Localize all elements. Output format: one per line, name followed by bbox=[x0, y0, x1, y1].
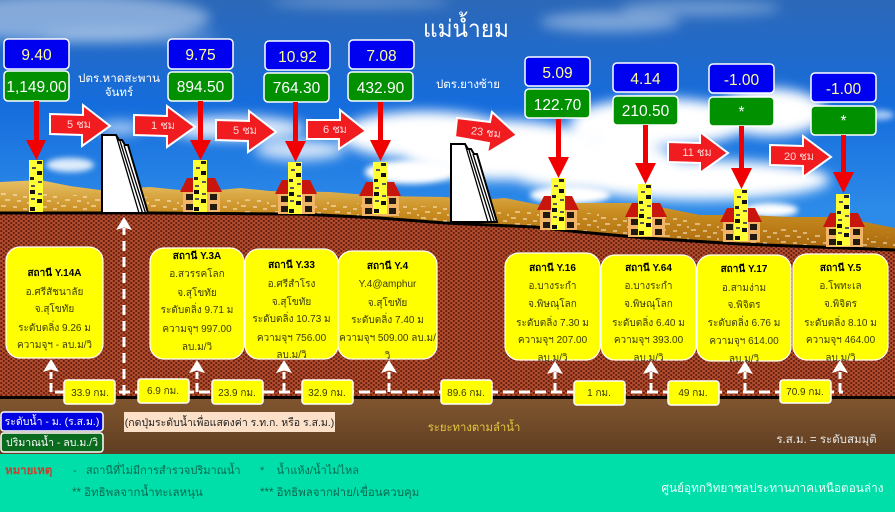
station card Y.3A: จ.สุโขทัย bbox=[177, 286, 217, 299]
station card Y.14A: จ.สุโขทัย bbox=[35, 302, 74, 315]
station card Y.17 bbox=[697, 255, 791, 365]
remarks heading: หมายเหตุ bbox=[5, 465, 52, 478]
station card Y.16: จ.พิษณุโลก bbox=[528, 297, 577, 310]
water level bbox=[709, 64, 774, 93]
house bbox=[720, 208, 762, 242]
remarks bbox=[5, 462, 419, 499]
gauge bbox=[29, 160, 43, 212]
station card Y.17: ความจุฯ 614.00 bbox=[709, 336, 779, 347]
station card Y.5 bbox=[793, 254, 888, 364]
station card Y.33: ความจุฯ 756.00 bbox=[257, 333, 327, 344]
arrow: 23 hours bbox=[455, 112, 517, 153]
station card Y.64: จ.พิษณุโลก bbox=[624, 297, 673, 310]
footer band bbox=[0, 454, 895, 512]
distance 33.9 km: 33.9 กม. bbox=[71, 388, 109, 399]
river bed base line bbox=[0, 396, 895, 399]
arrow: 23 hours: 23 ชม bbox=[470, 125, 502, 141]
station card Y.64: ความจุฯ 393.00 bbox=[614, 335, 684, 346]
pointer arrow bbox=[731, 126, 752, 189]
distance 6.9 km bbox=[138, 379, 189, 403]
station card Y.16: อ.บางระกำ bbox=[528, 281, 577, 292]
water level bbox=[265, 41, 330, 70]
arrow: 1 hour: 1 ชม bbox=[151, 120, 175, 132]
distance 32.9 km: 32.9 กม. bbox=[308, 388, 346, 399]
legend: water level button bbox=[1, 412, 103, 431]
pointer arrow bbox=[26, 101, 46, 160]
arrow: 1 hour bbox=[134, 106, 195, 147]
distance 33.9 km bbox=[64, 380, 115, 404]
arrow: 11 hours: 11 ชม bbox=[682, 147, 712, 159]
arrow: 5 hours: 5 ชม bbox=[67, 119, 91, 131]
station card Y.16: สถานี Y.16 bbox=[529, 262, 576, 274]
water level bbox=[4, 39, 69, 69]
water level bbox=[811, 73, 876, 102]
water level: 10.92 bbox=[278, 49, 317, 66]
station card Y.3A: ความจุฯ 997.00 bbox=[162, 324, 232, 335]
station card Y.3A: ลบ.ม/วิ bbox=[182, 342, 212, 353]
legend: discharge button: ปริมาณน้ำ - ลบ.ม./วิ bbox=[6, 435, 98, 449]
station card Y.4: Y.4@amphur bbox=[359, 279, 417, 290]
house bbox=[537, 196, 579, 230]
discharge: 210.50 bbox=[622, 103, 670, 120]
remark: weir: *** อิทธิพลจากฝาย/เขื่อนควบคุม bbox=[260, 484, 419, 499]
station card Y.4: ระดับตลิ่ง 7.40 ม bbox=[351, 312, 424, 326]
arrow: 5 hours: 5 ชม bbox=[233, 125, 257, 137]
station Y.3A reading bbox=[168, 39, 233, 212]
lower soil band bbox=[0, 398, 895, 454]
credit: ศูนย์อุทกวิทยาชลประทานภาคเหนือตอนล่าง bbox=[662, 481, 883, 496]
distance 1 km: 1 กม. bbox=[587, 388, 611, 399]
flow arrowheads bbox=[43, 217, 848, 374]
station card Y.64: ระดับตลิ่ง 6.40 ม bbox=[612, 315, 685, 329]
distance 1 km bbox=[574, 381, 625, 405]
dam label: hat saphan chan: จันทร์ bbox=[105, 85, 133, 99]
arrow: 6 hours: 6 ชม bbox=[323, 124, 347, 136]
dam: hat saphan chan bbox=[102, 135, 148, 213]
station card Y.64: สถานี Y.64 bbox=[625, 262, 672, 274]
distance labels bbox=[64, 379, 831, 405]
arrow: 5 hours bbox=[50, 105, 110, 146]
station card Y.3A: อ.สวรรคโลก bbox=[169, 267, 225, 280]
station card Y.3A: ระดับตลิ่ง 9.71 ม bbox=[161, 302, 233, 316]
arrow: 5 hours bbox=[216, 111, 276, 152]
water level: -1.00 bbox=[724, 72, 760, 89]
station card Y.4 bbox=[338, 251, 437, 362]
water level bbox=[613, 63, 678, 92]
pointer arrow bbox=[833, 135, 854, 193]
pointer arrow bbox=[548, 119, 569, 178]
sky background bbox=[0, 0, 895, 260]
station card Y.33: อ.ศรีสำโรง bbox=[268, 277, 316, 290]
station Y.17 reading bbox=[709, 64, 774, 242]
water level: 5.09 bbox=[542, 65, 573, 82]
station card Y.14A: สถานี Y.14A bbox=[27, 267, 82, 279]
station card Y.4: สถานี Y.4 bbox=[367, 260, 409, 272]
legend: discharge button bbox=[1, 433, 103, 452]
station card Y.16: ลบ.ม/วิ bbox=[537, 353, 568, 364]
station Y.4 reading bbox=[348, 40, 414, 216]
pointer arrow bbox=[635, 125, 656, 184]
discharge bbox=[168, 72, 233, 101]
distance 89.6 km bbox=[441, 380, 492, 404]
water level bbox=[525, 57, 590, 86]
gauge bbox=[734, 189, 748, 241]
station card Y.5: จ.พิจิตร bbox=[824, 299, 858, 310]
water level: 9.40 bbox=[21, 47, 52, 64]
remark: no survey: - สถานีที่ไม่มีการสำรวจปริมาณน้ำ bbox=[73, 462, 241, 477]
discharge: 1,149.00 bbox=[6, 79, 67, 96]
station card Y.16: ระดับตลิ่ง 7.30 ม bbox=[516, 315, 589, 329]
dam label: hat saphan chan bbox=[78, 73, 160, 99]
discharge: 122.70 bbox=[534, 97, 582, 114]
station card Y.4: ความจุฯ 509.00 ลบ.ม/ bbox=[339, 333, 436, 344]
station card Y.64 bbox=[601, 255, 696, 364]
station Y.5 reading bbox=[811, 73, 876, 247]
station card Y.16 bbox=[505, 253, 600, 364]
discharge bbox=[613, 96, 678, 125]
station Y.33 reading bbox=[264, 41, 330, 214]
station card Y.33: จ.สุโขทัย bbox=[272, 295, 311, 308]
house bbox=[275, 180, 317, 214]
pointer arrow bbox=[285, 102, 306, 162]
gauge bbox=[836, 194, 850, 246]
dam label: yang sai: ปตร.ยางซ้าย bbox=[436, 78, 500, 91]
station card Y.5: ระดับตลิ่ง 8.10 ม bbox=[804, 315, 877, 329]
water level: 7.08 bbox=[366, 48, 397, 65]
axis label: distance along river: ระยะทางตามลำน้ำ bbox=[428, 419, 520, 434]
station card Y.3A: สถานี Y.3A bbox=[173, 250, 221, 262]
water level: 4.14 bbox=[630, 71, 661, 88]
arrow: 20 hours bbox=[770, 136, 831, 177]
discharge: 432.90 bbox=[357, 80, 405, 97]
station Y.14A reading bbox=[4, 39, 69, 212]
station card Y.17: ระดับตลิ่ง 6.76 ม bbox=[708, 315, 780, 329]
station card Y.33: ระดับตลิ่ง 10.73 ม bbox=[252, 311, 331, 325]
water level bbox=[349, 40, 414, 69]
house bbox=[359, 182, 401, 216]
station card Y.4: จ.สุโขทัย bbox=[368, 296, 407, 309]
discharge: * bbox=[738, 104, 745, 121]
pointer arrow bbox=[190, 101, 211, 160]
river bed bbox=[0, 213, 895, 398]
river distance dashed line bbox=[51, 228, 843, 395]
distance 49 km bbox=[668, 381, 719, 405]
discharge bbox=[709, 97, 774, 126]
distance 32.9 km bbox=[302, 380, 353, 404]
distance 70.9 km bbox=[780, 380, 831, 403]
station card Y.17: อ.สามง่าม bbox=[722, 283, 766, 294]
gauge bbox=[288, 162, 302, 214]
station card Y.5: สถานี Y.5 bbox=[820, 262, 862, 274]
dam label: hat saphan chan: ปตร.หาดสะพาน bbox=[78, 73, 160, 85]
station card Y.17: สถานี Y.17 bbox=[721, 263, 768, 275]
water level: -1.00 bbox=[826, 81, 862, 98]
station card Y.33 bbox=[245, 249, 338, 361]
house bbox=[625, 203, 667, 237]
remark: dry: * น้ำแห้ง/น้ำไม่ไหล bbox=[260, 462, 359, 477]
station card Y.5: อ.โพทะเล bbox=[819, 279, 862, 292]
remark: tidal: ** อิทธิพลจากน้ำทะเลหนุน bbox=[72, 484, 203, 499]
discharge bbox=[525, 89, 590, 118]
discharge: 764.30 bbox=[273, 80, 321, 97]
station card Y.33: สถานี Y.33 bbox=[268, 259, 315, 271]
discharge bbox=[348, 72, 413, 101]
arrow: 6 hours bbox=[307, 110, 366, 149]
station card Y.17: จ.พิจิตร bbox=[728, 300, 761, 311]
discharge bbox=[811, 106, 876, 135]
water level bbox=[168, 39, 233, 69]
station card Y.64: ลบ.ม/วิ bbox=[633, 353, 664, 364]
discharge: * bbox=[840, 113, 847, 130]
gauge bbox=[373, 162, 387, 214]
distance 49 km: 49 กม. bbox=[678, 388, 708, 399]
dam: yang sai bbox=[451, 144, 497, 222]
house bbox=[180, 178, 222, 212]
station card Y.5: ลบ.ม/วิ bbox=[825, 353, 856, 364]
arrow: 11 hours bbox=[668, 132, 728, 173]
station card Y.4: วิ bbox=[384, 351, 390, 362]
instruction note bbox=[124, 412, 335, 432]
water level: 9.75 bbox=[185, 47, 216, 64]
station card Y.14A: อ.ศรีสัชนาลัย bbox=[26, 286, 83, 298]
station card Y.14A bbox=[6, 247, 103, 358]
title: แม่น้ำยม bbox=[423, 11, 509, 43]
station Y.64 reading bbox=[613, 63, 678, 237]
sand hills bbox=[0, 180, 895, 252]
station card Y.3A bbox=[150, 248, 244, 359]
distance 23.9 km bbox=[212, 380, 263, 404]
pointer arrow bbox=[370, 102, 391, 161]
station Y.16 reading bbox=[525, 57, 590, 230]
legend: water level button: ระดับน้ำ - ม. (ร.ส.ม.) bbox=[5, 414, 99, 428]
arrow: 20 hours: 20 ชม bbox=[784, 151, 814, 163]
station card Y.14A: ความจุฯ - ลบ.ม/วิ bbox=[17, 340, 92, 351]
distance 6.9 km: 6.9 กม. bbox=[147, 386, 179, 397]
station card Y.14A: ระดับตลิ่ง 9.26 ม bbox=[18, 320, 91, 334]
gauge bbox=[193, 160, 207, 212]
distance 89.6 km: 89.6 กม. bbox=[447, 388, 485, 399]
gauge bbox=[638, 184, 652, 236]
travel time arrows bbox=[50, 105, 831, 177]
station card Y.16: ความจุฯ 207.00 bbox=[518, 335, 588, 346]
distance 70.9 km: 70.9 กม. bbox=[786, 387, 824, 398]
discharge bbox=[4, 71, 69, 101]
station card Y.33: ลบ.ม/วิ bbox=[276, 350, 307, 361]
discharge bbox=[264, 73, 329, 102]
instruction note: (กดปุ่มระดับน้ำเพื่อแสดงค่า ร.ท.ก. หรือ ร.ส.ม.) bbox=[125, 415, 334, 429]
datum note: ร.ส.ม. = ระดับสมมุติ bbox=[776, 433, 877, 446]
house bbox=[823, 213, 865, 247]
station card Y.5: ความจุฯ 464.00 bbox=[806, 335, 876, 346]
station card Y.64: อ.บางระกำ bbox=[624, 281, 673, 292]
distance 23.9 km: 23.9 กม. bbox=[218, 388, 256, 399]
station card Y.17: ลบ.ม/วิ bbox=[729, 354, 759, 365]
gauge bbox=[551, 178, 565, 230]
discharge: 894.50 bbox=[177, 79, 225, 96]
